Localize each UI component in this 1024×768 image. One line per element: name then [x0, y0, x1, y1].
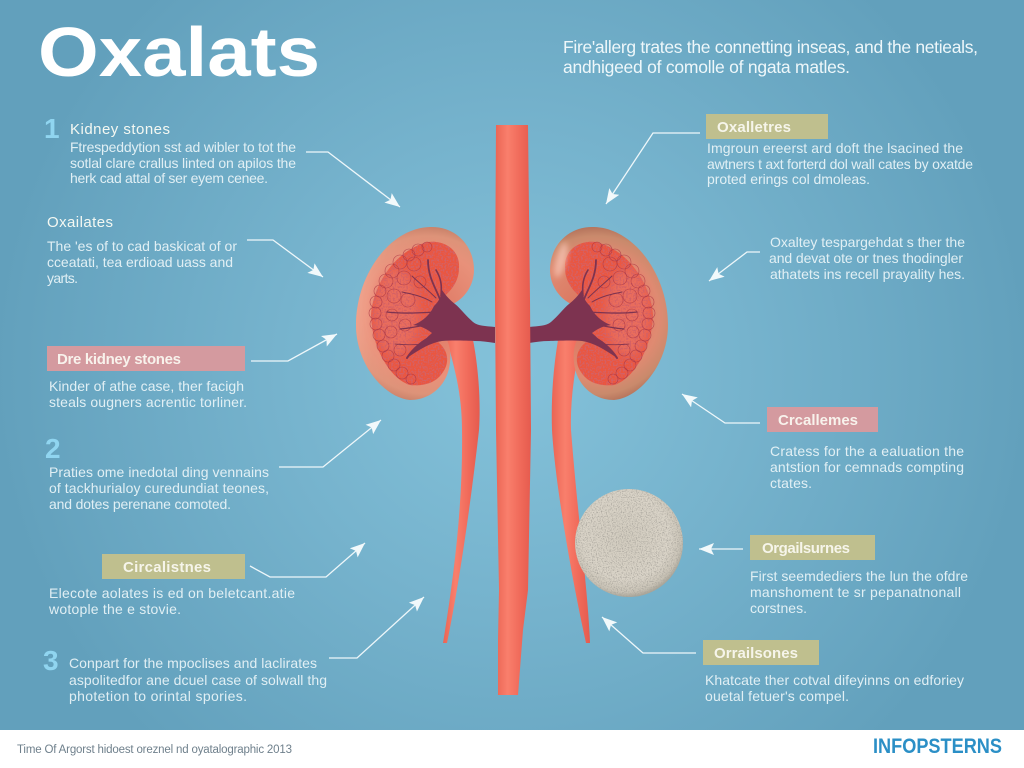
left ureter [443, 340, 480, 643]
arrow 4 [279, 420, 381, 467]
oxalletres description: awtners t axt forterd dol wall cates by oxatde [707, 156, 973, 172]
oxalates text block [47, 214, 237, 286]
kidney anatomy illustration [356, 125, 668, 695]
right ureter [552, 340, 590, 643]
olive label: Oxalletres [706, 114, 828, 139]
oxalates text block: Oxailates [47, 214, 113, 231]
oxalletres description: proted erings col dmoleas. [707, 171, 870, 187]
oxaltey text block [769, 234, 965, 282]
item 2 text block: and dotes perenane comoted. [49, 496, 231, 512]
oxalates text block: The 'es of to cad baskicat of or [47, 238, 237, 254]
crcallemes description: Cratess for the a ealuation the [770, 443, 964, 459]
pink label: Dre kidney stones [47, 346, 245, 371]
crcallemes description: antstion for cemnads compting [770, 459, 964, 475]
footer credit: Time Of Argorst hidoest oreznel nd oyatalographic 2013 [17, 744, 292, 756]
pink label: Crcallemes [767, 407, 878, 432]
arrow 3 [251, 334, 337, 361]
right kidney [529, 227, 668, 400]
oxaltey text block: and devat ote or tnes thodingler [769, 250, 963, 266]
item 1 text block [70, 121, 296, 186]
orgailsurnes description: First seemdediers the lun the ofdre [750, 568, 968, 584]
item 2 text block [49, 464, 269, 512]
kidney stones description: steals ougners acrentic torliner. [49, 394, 247, 410]
olive label: Orgailsurnes [750, 535, 875, 560]
arrow right 2 [709, 252, 760, 281]
arrow right 1 [606, 133, 700, 204]
right kidney highlight [552, 241, 570, 279]
footer [0, 730, 1024, 768]
arrow right 4 [699, 548, 743, 550]
circalistnes description [48, 585, 295, 617]
title: Oxalats [38, 13, 320, 91]
item 3 text block: photetion to orintal spories. [69, 688, 247, 704]
item 2 text block: Praties ome inedotal ding vennains [49, 464, 269, 480]
arrow 5 [250, 543, 365, 577]
oxalates text block: yarts. [47, 270, 78, 286]
olive label: Circalistnes: Circalistnes [123, 559, 211, 576]
olive label: Orrailsones: Orrailsones [714, 645, 798, 662]
circalistnes description: wotople the e stovie. [48, 601, 181, 617]
item 2 number: 2 [45, 433, 61, 464]
oxalates text block: cceatati, tea erdioad uass and [47, 254, 233, 270]
item 2 text block: of tackhurialoy curedundiat teones, [49, 480, 269, 496]
pink label: Crcallemes: Crcallemes [778, 412, 858, 429]
item 1 text block: herk cad attal of ser eyem cenee. [70, 170, 268, 186]
header intro text [563, 37, 978, 77]
arrow right 5 [602, 617, 696, 653]
item 1 number: 1 [44, 113, 60, 144]
orgailsurnes description: manshoment te sr pepanatnonall [750, 584, 961, 600]
item 3 text block: aspolitedfor ane dcuel case of solwall thg [69, 672, 327, 688]
header intro text: Fire'allerg trates the connetting inseas, and the netieals, [563, 37, 978, 57]
arrow 2 [247, 240, 323, 277]
crcallemes description: ctates. [770, 475, 812, 491]
oxaltey text block: athatets ins recell prayality hes. [770, 266, 965, 282]
kidney stone [575, 489, 683, 597]
orrailsones description [705, 672, 964, 704]
kidney stones description: Kinder of athe case, ther facigh [49, 378, 244, 394]
footer logo: INFOPSTERNS [873, 735, 1002, 758]
orgailsurnes description: corstnes. [750, 600, 807, 616]
central vessel [495, 125, 531, 695]
oxalletres description [707, 140, 973, 187]
olive label: Orgailsurnes: Orgailsurnes [762, 540, 850, 557]
orrailsones description: Khatcate ther cotval difeyinns on edforiey [705, 672, 964, 688]
header intro text: andhigeed of comolle of ngata matles. [563, 57, 850, 77]
kidney stones description [49, 378, 247, 410]
crcallemes description [770, 443, 964, 491]
pink label: Dre kidney stones: Dre kidney stones [57, 351, 181, 368]
item 3 number: 3 [43, 645, 59, 676]
oxaltey text block: Oxaltey tespargehdat s ther the [770, 234, 965, 250]
olive label: Oxalletres: Oxalletres [717, 119, 791, 136]
oxalletres description: Imgroun ereerst ard doft the lsacined the [707, 140, 963, 156]
item 1 text block: sotlal clare crallus linted on apilos the [70, 155, 296, 171]
orgailsurnes description [750, 568, 968, 616]
item 1 text block: Kidney stones [70, 121, 170, 138]
item 3 text block [69, 655, 327, 704]
arrow 6 [329, 597, 424, 658]
left kidney [356, 227, 495, 400]
circalistnes description: Elecote aolates is ed on beletcant.atie [49, 585, 295, 601]
item 3 text block: Conpart for the mpoclises and laclirates [69, 655, 317, 671]
olive label: Circalistnes [102, 554, 245, 579]
item 1 text block: Ftrespeddytion sst ad wibler to tot the [70, 139, 296, 155]
arrow 1 [306, 152, 400, 207]
orrailsones description: ouetal fetuer's compel. [705, 688, 849, 704]
olive label: Orrailsones [703, 640, 819, 665]
arrow right 3 [682, 394, 760, 423]
